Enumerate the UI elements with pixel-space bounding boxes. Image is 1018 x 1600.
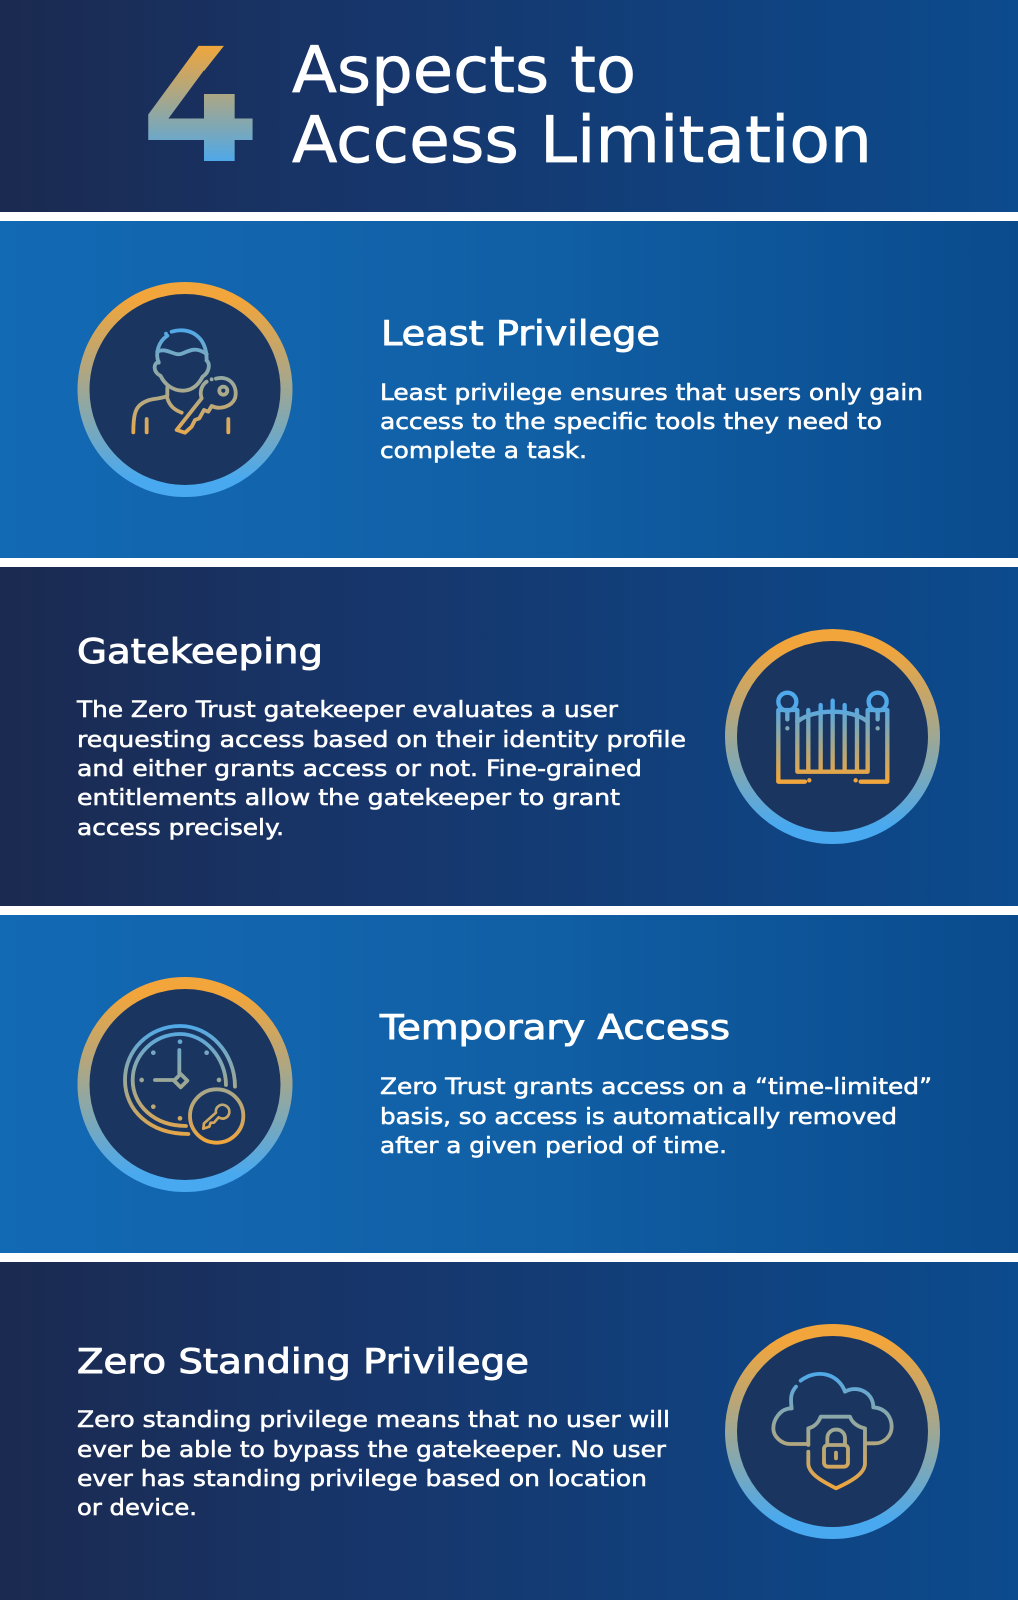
body text: Zero standing privilege means that no user will [77, 1408, 670, 1433]
body text: access precisely. [77, 816, 284, 841]
divider 4 [0, 1253, 1018, 1262]
heading: Temporary Access [379, 1008, 730, 1048]
body text: requesting access based on their identity profile [77, 728, 686, 753]
divider 3 [0, 906, 1018, 915]
panel: zero standing privilege [0, 1262, 1018, 1600]
icon badge: cloud with shield lock [731, 1330, 934, 1533]
body text: or device. [77, 1496, 197, 1521]
panel: least privilege [0, 221, 1018, 558]
icon badge: clock with key [84, 983, 286, 1186]
heading: Gatekeeping [77, 632, 323, 672]
title [292, 34, 872, 178]
body text: Least privilege ensures that users only gain [380, 381, 923, 406]
divider 1 [0, 212, 1018, 221]
body text: basis, so access is automatically removed [380, 1105, 897, 1130]
body text [380, 381, 923, 464]
body text: entitlements allow the gatekeeper to grant [77, 786, 620, 811]
panel: header [0, 0, 1018, 212]
title: Aspects to [292, 34, 636, 108]
body text [77, 1408, 670, 1521]
icon badge: user with key [84, 288, 286, 491]
body text: after a given period of time. [380, 1134, 727, 1159]
panel: temporary access [0, 915, 1018, 1253]
body text: ever has standing privilege based on location [77, 1467, 647, 1492]
body text: The Zero Trust gatekeeper evaluates a user [76, 698, 619, 723]
body text: complete a task. [380, 439, 587, 464]
heading: Least Privilege [381, 314, 660, 354]
body text [380, 1075, 932, 1159]
heading: Zero Standing Privilege [77, 1342, 529, 1382]
body text: ever be able to bypass the gatekeeper. No user [77, 1438, 667, 1463]
body text [76, 698, 686, 841]
big number 4: 4 [140, 15, 260, 199]
icon badge: gate [731, 635, 934, 838]
body text: and either grants access or not. Fine-grained [77, 757, 642, 782]
title: Access Limitation [292, 104, 872, 178]
divider 2 [0, 558, 1018, 567]
body text: Zero Trust grants access on a “time-limited” [380, 1075, 932, 1100]
body text: access to the specific tools they need to [380, 410, 882, 435]
panel: gatekeeping [0, 567, 1018, 906]
